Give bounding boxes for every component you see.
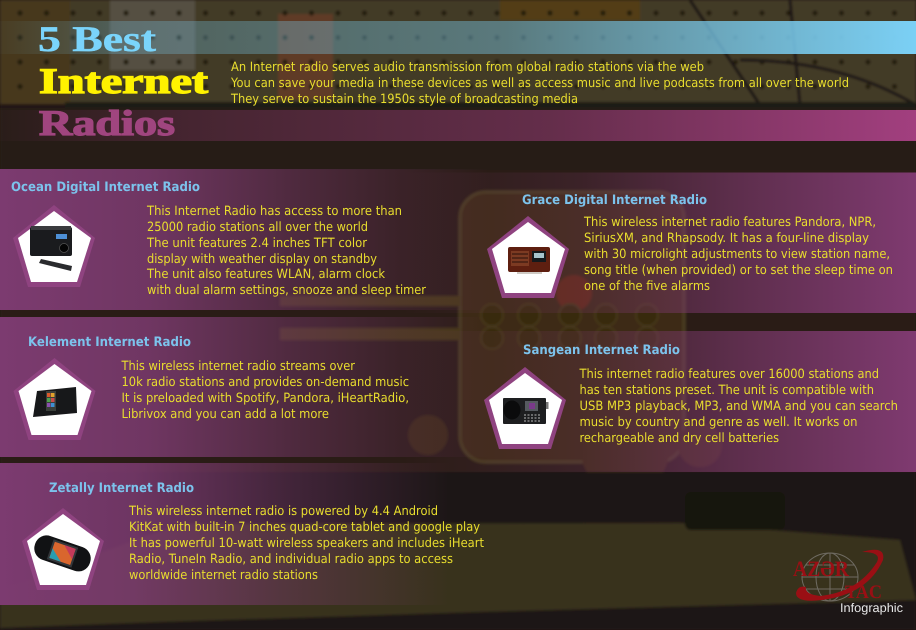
description: Sangean: rechargeable and dry cell batteries [580,431,779,446]
description: Zetally: worldwide internet radio stations [129,568,318,583]
icon: Kelement radio [14,358,96,440]
icon: Zetally tablet radio [22,508,104,590]
description: Grace Digital: one of the five alarms [584,279,710,294]
panel: Grace Digital Internet Radio [487,193,893,298]
description: Grace Digital [583,215,893,294]
logo: AZERTAC globe [793,550,883,603]
panel: Sangean Internet Radio [484,343,898,449]
logo: AZERTAC globe: TAC [845,582,882,603]
icon: Sangean radio [484,367,566,449]
description: Sangean [579,367,898,446]
description: Ocean Digital: display with weather display on standby [147,252,377,267]
title: Radios [39,103,175,143]
description: Ocean Digital [146,204,427,298]
description: Grace Digital: SiriusXM, and Rhapsody. It has a four-line display [584,231,869,246]
description: Sangean: This internet radio features over 16000 stations and [579,367,879,382]
panel: Kelement Internet Radio [14,335,409,440]
description: Ocean Digital: This Internet Radio has access to more than [146,204,402,219]
description: Kelement: It is preloaded with Spotify, Pandora, iHeartRadio, [122,391,409,406]
description: Sangean: has ten stations preset. The unit is compatible with [580,383,874,398]
description: Zetally: It has powerful 10-watt wireless speakers and includes iHeart [129,536,484,551]
left panel background: Ocean Digital [0,169,490,310]
intro text: They serve to sustain the 1950s style of broadcasting media [230,92,578,107]
panel: Zetally Internet Radio [22,481,484,590]
right panel background: Grace Digital [400,172,916,313]
heading: Kelement: Kelement Internet Radio [28,335,191,350]
icon: Ocean Digital radio with remote [13,205,95,287]
description: Kelement [121,359,409,422]
description: Zetally: KitKat with built-in 7 inches quad-core tablet and google play [129,520,480,535]
heading: Sangean: Sangean Internet Radio [523,343,680,358]
blue header band [0,21,916,54]
title [38,19,208,143]
description: Grace Digital: This wireless internet radio features Pandora, NPR, [583,215,876,230]
right panel background: Sangean [400,331,916,472]
label: Infographic: Infographic [840,601,903,615]
pink header band [0,110,916,141]
description: Kelement: Librivox and you can add a lot more [122,407,329,422]
description: Ocean Digital: 25000 radio stations all over the world [147,220,368,235]
left panel background: Kelement [0,317,490,457]
description: Zetally: Radio, TuneIn Radio, and individual radio apps to access [129,552,453,567]
logo: AZERTAC globe: AZƏR [793,556,850,581]
heading: Grace Digital: Grace Digital Internet Radio [522,193,707,208]
heading: Ocean Digital: Ocean Digital Internet Radio [11,180,200,195]
panel: Ocean Digital Internet Radio [11,180,427,298]
description: Kelement: 10k radio stations and provides on-demand music [122,375,409,390]
title: 5 Best [38,19,156,59]
icon: Grace Digital wooden radio [487,216,569,298]
intro text [230,60,849,107]
description: Zetally: This wireless internet radio is powered by 4.4 Android [128,504,438,519]
description: Sangean: music by country and genre as well. It works on [580,415,858,430]
description: Ocean Digital: The unit also features WLAN, alarm clock [146,267,386,282]
description: Kelement: This wireless internet radio streams over [121,359,356,374]
description: Ocean Digital: with dual alarm settings, snooze and sleep timer [147,283,427,298]
description: Ocean Digital: The unit features 2.4 inches TFT color [146,236,368,251]
heading: Zetally: Zetally Internet Radio [49,481,194,496]
title: Internet [39,61,208,101]
description: Zetally [128,504,484,583]
intro text: You can save your media in these devices as well as access music and live podcasts from all over the world [230,76,849,91]
intro text: An Internet radio serves audio transmission from global radio stations via the web [231,60,704,75]
left panel background: Zetally [0,463,450,605]
